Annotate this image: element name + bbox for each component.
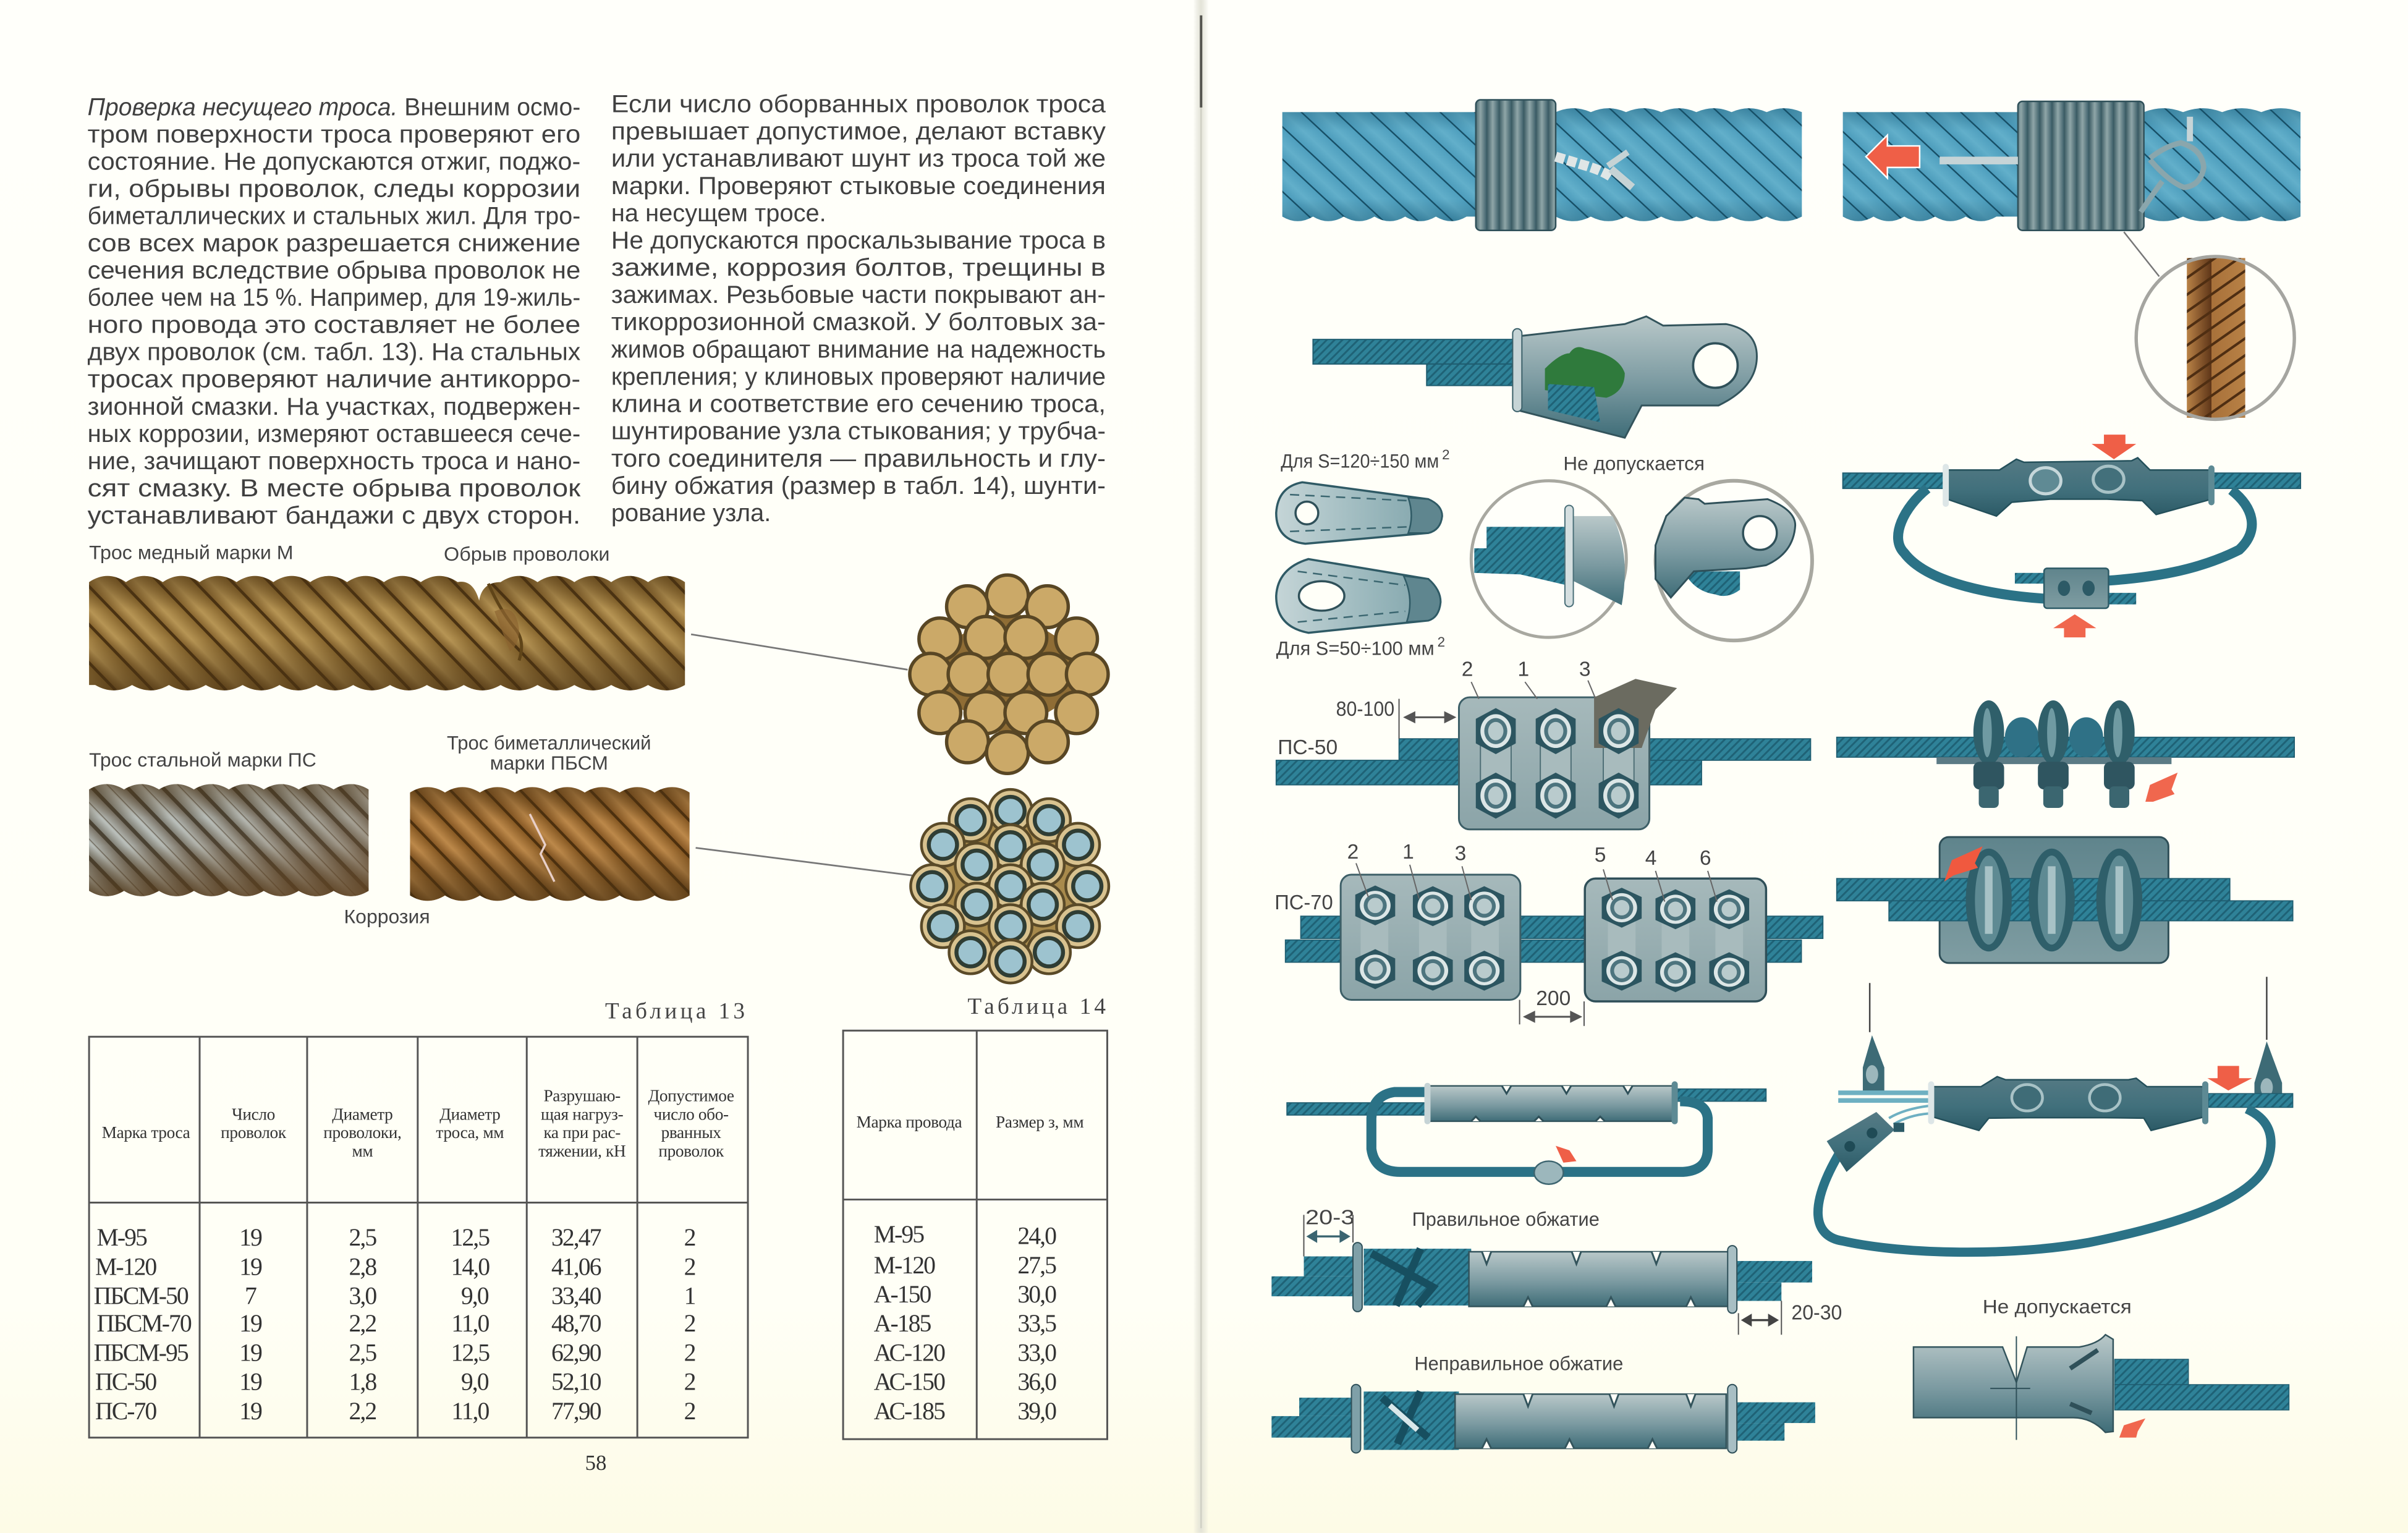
table 13: 2: [684, 1369, 695, 1396]
text column 2: рование узла.: [611, 499, 771, 527]
text column 1: биметаллических и стальных жил. Для тро-: [88, 203, 580, 230]
text column 2: на несущем тросе.: [611, 200, 826, 227]
table 13: ПС-50: [95, 1369, 156, 1396]
table 14: 24,0: [1017, 1223, 1056, 1250]
table 13: 41,06: [551, 1253, 601, 1280]
label: lug sizes and not allowed: Для S=50÷100 мм: [1276, 638, 1435, 660]
table 14: 30,0: [1017, 1281, 1056, 1308]
text column 1: ние, зачищают поверхность троса и нано-: [88, 448, 580, 475]
table 13: Диаметр: [439, 1105, 500, 1123]
PS-70 labels and dimension: 1: [1402, 841, 1414, 864]
captions for ropes: Коррозия: [344, 906, 430, 927]
table 14: 33,0: [1017, 1339, 1056, 1366]
table 13: рванных: [661, 1123, 721, 1142]
captions for ropes: [89, 541, 651, 927]
text column 1: тросах проверяют наличие антикорро-: [88, 366, 580, 393]
table 13: 19: [239, 1369, 262, 1396]
not-allowed crimp detail: [1914, 1296, 2289, 1440]
text column 1: ги, обрывы проволок, следы коррозии: [88, 175, 580, 202]
table 13: мм: [352, 1142, 373, 1160]
PS-50 labels and dimension: [1278, 658, 1596, 759]
table 14: М-120: [874, 1252, 935, 1279]
PS-50 labels and dimension: 2: [1462, 658, 1473, 681]
table 14: А-150: [874, 1281, 931, 1308]
text column 2: клина и соответствие его сечению троса,: [611, 391, 1106, 418]
table 14: М-95: [874, 1221, 924, 1248]
table 13: 2,5: [349, 1339, 376, 1366]
table 14 caption: Таблица 14: [967, 994, 1109, 1019]
table 13: Число: [232, 1105, 275, 1123]
hardware clamp with shunt and arrows: [1843, 435, 2300, 637]
table 13: 19: [239, 1339, 262, 1366]
table 14: [843, 1030, 1107, 1439]
table 13: проволоки,: [323, 1123, 402, 1142]
table 14: АС-120: [874, 1339, 945, 1366]
table 13: 3,0: [349, 1283, 376, 1310]
table 13: 19: [239, 1224, 262, 1251]
PS-70 labels and dimension: 5: [1595, 844, 1606, 867]
captions for ropes: Трос медный марки М: [89, 541, 294, 563]
table 13: 14,0: [451, 1253, 490, 1280]
text column 2: жимов обращают внимание на надежность: [611, 336, 1106, 363]
text column 1: Проверка несущего троса. Внешним осмо-: [88, 93, 580, 121]
text column 1: более чем на 15 %. Например, для 19-жиль-: [88, 284, 580, 311]
table 13: ПБСМ-50: [94, 1283, 189, 1310]
table 14: 27,5: [1017, 1252, 1056, 1279]
table 13: 12,5: [451, 1224, 490, 1251]
incorrect crimp: Неправильное обжатие: [1414, 1353, 1623, 1374]
table 13: проволок: [221, 1123, 287, 1142]
table 13: Допустимое: [648, 1087, 734, 1105]
correct crimp: 20-3: [1305, 1206, 1355, 1229]
table 13: 12,5: [451, 1339, 490, 1366]
table 13: [89, 1037, 748, 1438]
table 13: Разрушаю-: [543, 1087, 621, 1105]
blue rope with twisted bandage: [1282, 100, 1802, 231]
PS-50 labels and dimension: 3: [1579, 658, 1591, 681]
PS-70 clamp rear view: [1837, 837, 2293, 963]
text column 2: превышает допустимое, делают вставку: [611, 118, 1106, 145]
table 13: 2: [684, 1398, 695, 1425]
PS-70 double clamp front view: [1286, 875, 1823, 1001]
PS-50 labels and dimension: 80-100: [1336, 698, 1394, 721]
PS-70 labels and dimension: 3: [1455, 842, 1466, 865]
table 13: ПБСМ-70: [97, 1310, 192, 1337]
wedge inserts: [1276, 482, 1442, 633]
label: lug sizes and not allowed: 2: [1438, 634, 1445, 650]
label: lug sizes and not allowed: [1276, 447, 1705, 660]
PS-70 labels and dimension: 200: [1536, 987, 1571, 1010]
table 14: А-185: [874, 1310, 931, 1337]
text column 2: зажиме, коррозия болтов, трещины в: [611, 254, 1106, 281]
table 14: АС-150: [874, 1369, 945, 1396]
text column 1: сечения вследствие обрыва проволок не: [88, 257, 580, 284]
captions for ropes: марки ПБСМ: [490, 752, 608, 774]
table 13: 2: [684, 1310, 695, 1337]
table 13: 2,2: [349, 1398, 376, 1425]
table 14: 39,0: [1017, 1398, 1056, 1425]
table 13: троса, мм: [436, 1123, 504, 1142]
text column 2: шунтирование узла стыкования; у трубча-: [611, 418, 1106, 445]
text column 2: Не допускаются проскальзывание троса в: [611, 227, 1106, 254]
PS-50 clamp front view: [1276, 679, 1810, 830]
text column 1: ных коррозии, измеряют оставшееся сече-: [88, 420, 580, 448]
table 13: 19: [239, 1398, 262, 1425]
magnified copper wire circle: [2124, 232, 2294, 419]
cross-section: copper rope: [910, 575, 1108, 773]
table 13: проволок: [658, 1142, 724, 1160]
table 13: 2,2: [349, 1310, 376, 1337]
captions for ropes: Трос биметаллический: [447, 733, 651, 754]
lug clamp with cutaway: [1313, 316, 1757, 438]
big shunt assembly with suspension wires: [1818, 977, 2293, 1252]
table 13: 11,0: [451, 1398, 489, 1425]
table 13: число обо-: [653, 1105, 729, 1123]
table 13: 1,8: [349, 1369, 376, 1396]
table 13: 19: [239, 1253, 262, 1280]
text column 2: зажимах. Резьбовые части покрывают ан-: [611, 281, 1106, 308]
table 13: 52,10: [551, 1369, 601, 1396]
text column 1: устанавливают бандажи с двух сторон.: [88, 502, 580, 529]
table 14: АС-185: [874, 1398, 945, 1425]
text column 1: тром поверхности троса проверяют его: [88, 121, 580, 148]
text column 2: крепления; у клиновых проверяют наличие: [611, 363, 1106, 390]
table 13: 1: [684, 1283, 695, 1310]
captions for ropes: Трос стальной марки ПС: [89, 749, 316, 771]
not-allowed crimp detail: Не допускается: [1983, 1296, 2132, 1317]
PS-70 labels and dimension: 2: [1347, 841, 1359, 864]
table 13: 33,40: [551, 1283, 601, 1310]
incorrect crimp: [1271, 1353, 1815, 1453]
steel rope PS: [89, 784, 368, 896]
table 14: 33,5: [1017, 1310, 1056, 1337]
text column 2: бину обжатия (размер в табл. 14), шунти-: [611, 472, 1106, 499]
text column 1: [88, 93, 581, 529]
table 13: 11,0: [451, 1310, 489, 1337]
PS-70 labels and dimension: [1274, 841, 1717, 1026]
text column 1: сов всех марок разрешается снижение: [88, 230, 580, 257]
table 13: 2: [684, 1339, 695, 1366]
PS-50 labels and dimension: ПС-50: [1278, 736, 1338, 759]
table 13: 77,90: [551, 1398, 601, 1425]
table 13: щая нагруз-: [541, 1105, 624, 1123]
magnifier: cable end at clamp: [1471, 481, 1626, 637]
magnifier: lug fracture: [1655, 481, 1812, 640]
table 13: 9,0: [461, 1369, 489, 1396]
table 13: 2: [684, 1224, 695, 1251]
table 13: 32,47: [551, 1224, 601, 1251]
connector lines to cross-sections: [691, 634, 912, 875]
PS-70 labels and dimension: 6: [1700, 847, 1711, 870]
bimetal rope PBSM: [410, 787, 690, 901]
table 13: ка при рас-: [543, 1123, 621, 1142]
copper rope M: [89, 576, 685, 690]
table 13: 9,0: [461, 1283, 489, 1310]
text column 2: тикоррозионной смазкой. У болтовых за-: [611, 308, 1106, 336]
text column 1: состояние. Не допускаются отжиг, поджо-: [88, 148, 580, 175]
text column 2: или устанавливают шунт из троса той же: [611, 145, 1106, 172]
table 13: Марка троса: [102, 1123, 190, 1142]
text column 2: Если число оборванных проволок троса: [611, 90, 1106, 117]
correct crimp: 20-30: [1791, 1301, 1842, 1324]
label: lug sizes and not allowed: 2: [1442, 447, 1450, 462]
label: lug sizes and not allowed: Для S=120÷150 мм: [1281, 451, 1439, 472]
blue rope with hook bandage and arrow: [1843, 101, 2300, 231]
correct crimp: Правильное обжатие: [1412, 1208, 1600, 1230]
table 14: 36,0: [1017, 1369, 1056, 1396]
table 13: Диаметр: [332, 1105, 392, 1123]
table 13 caption: Таблица 13: [605, 998, 748, 1024]
captions for ropes: Обрыв проволоки: [444, 543, 609, 565]
PS-70 labels and dimension: 4: [1645, 847, 1656, 870]
table 13: М-120: [95, 1253, 156, 1280]
PS-50 clamp side view: [1837, 700, 2294, 808]
table 13: ПБСМ-95: [94, 1339, 189, 1366]
text column 2: того соединителя — правильность и глу-: [611, 445, 1106, 472]
label: lug sizes and not allowed: Не допускается: [1563, 452, 1705, 474]
cross-section: bimetal rope: [910, 789, 1109, 983]
table 14: Марка провода: [857, 1113, 962, 1131]
text column 2: марки. Проверяют стыковые соединения: [611, 172, 1106, 200]
table 13: 7: [245, 1283, 256, 1310]
text column 1: сят смазку. В месте обрыва проволок: [88, 475, 581, 502]
text column 1: ного провода это составляет не более: [88, 312, 580, 339]
correct crimp: [1271, 1206, 1842, 1335]
table 13: 62,90: [551, 1339, 601, 1366]
text column 1: зионной смазки. На участках, подвержен-: [88, 393, 580, 420]
table 13: М-95: [97, 1224, 147, 1251]
table 13: 48,70: [551, 1310, 601, 1337]
table 13: 2: [684, 1253, 695, 1280]
page number: 58: [585, 1451, 606, 1475]
table 13: тяжении, кН: [538, 1142, 625, 1160]
text column 1: двух проволок (см. табл. 13). На стальных: [88, 339, 580, 366]
tube connector with shunt loop: [1287, 1081, 1766, 1184]
table 13: 2,5: [349, 1224, 376, 1251]
text column 2: [611, 90, 1106, 527]
PS-70 labels and dimension: ПС-70: [1274, 891, 1333, 914]
table 13: 19: [239, 1310, 262, 1337]
table 13: 2,8: [349, 1253, 376, 1280]
table 14: Размер з, мм: [996, 1113, 1083, 1131]
table 13: ПС-70: [95, 1398, 156, 1425]
PS-50 labels and dimension: 1: [1517, 658, 1529, 681]
